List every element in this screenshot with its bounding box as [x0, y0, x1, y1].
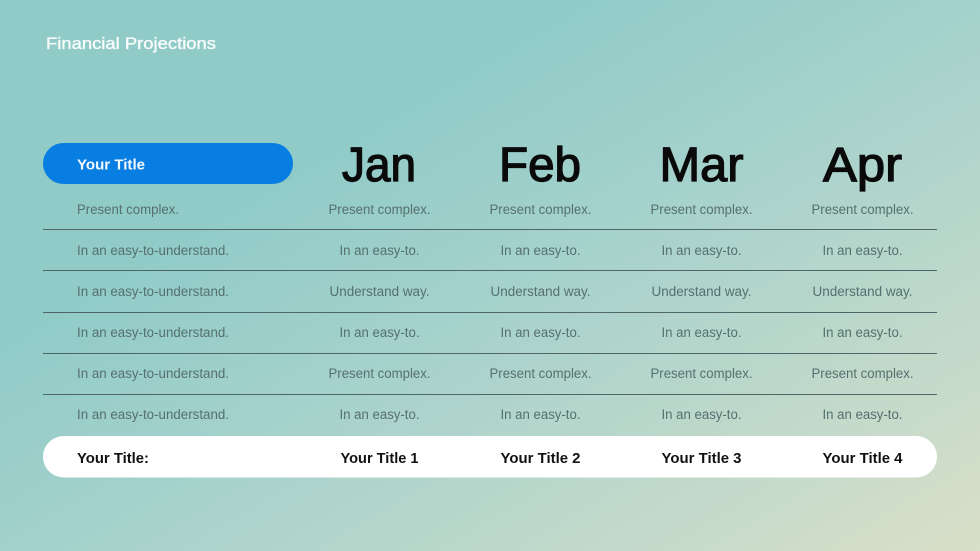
row 2: In an easy-to. — [500, 243, 580, 258]
row 4: In an easy-to. — [340, 325, 420, 340]
footer pill: Your Title 2 — [500, 450, 580, 467]
row 6: In an easy-to-understand. — [77, 407, 229, 422]
header pill: Your Title — [43, 143, 293, 184]
row 3 — [77, 284, 912, 299]
row 1: Present complex. — [328, 202, 430, 217]
row 6: In an easy-to. — [822, 407, 902, 422]
row 3: Understand way. — [812, 284, 912, 299]
row 2: In an easy-to. — [662, 243, 742, 258]
month headers: Jan — [342, 139, 416, 192]
month headers: Apr — [823, 139, 902, 192]
row 5: Present complex. — [650, 366, 752, 381]
footer pill: Your Title 4 — [822, 450, 903, 467]
row 1: Present complex. — [490, 202, 592, 217]
row 5: Present complex. — [812, 366, 914, 381]
title: Financial Projections — [46, 35, 216, 53]
row dividers — [43, 230, 937, 394]
row 5: In an easy-to-understand. — [77, 366, 229, 381]
row 2 — [77, 243, 902, 258]
row 6: In an easy-to. — [662, 407, 742, 422]
row 4: In an easy-to. — [500, 325, 580, 340]
month headers: Feb — [499, 139, 581, 192]
month headers — [342, 139, 902, 192]
footer pill: Your Title: — [77, 450, 149, 467]
row 5: Present complex. — [328, 366, 430, 381]
row 4: In an easy-to-understand. — [77, 325, 229, 340]
row 1: Present complex. — [650, 202, 752, 217]
row 2: In an easy-to. — [340, 243, 420, 258]
row 6: In an easy-to. — [340, 407, 420, 422]
month headers: Mar — [660, 139, 744, 192]
row 5 — [77, 366, 914, 381]
footer pill: Your Title 3 — [662, 450, 742, 467]
row 6 — [77, 407, 902, 422]
header pill: Your Title: Your Title — [77, 156, 145, 174]
row 1 — [77, 202, 914, 217]
row 4 — [77, 325, 902, 340]
footer pill: Your Title 1 — [340, 450, 418, 467]
row 5: Present complex. — [490, 366, 592, 381]
row 3: Understand way. — [652, 284, 752, 299]
row 4: In an easy-to. — [662, 325, 742, 340]
row 4: In an easy-to. — [822, 325, 902, 340]
row 2: In an easy-to-understand. — [77, 243, 229, 258]
footer pill — [43, 436, 937, 478]
row 3: Understand way. — [490, 284, 590, 299]
table — [43, 139, 937, 478]
row 6: In an easy-to. — [500, 407, 580, 422]
row 3: In an easy-to-understand. — [77, 284, 229, 299]
row 1: Present complex. — [77, 202, 179, 217]
row 2: In an easy-to. — [822, 243, 902, 258]
row 1: Present complex. — [812, 202, 914, 217]
row 3: Understand way. — [330, 284, 430, 299]
